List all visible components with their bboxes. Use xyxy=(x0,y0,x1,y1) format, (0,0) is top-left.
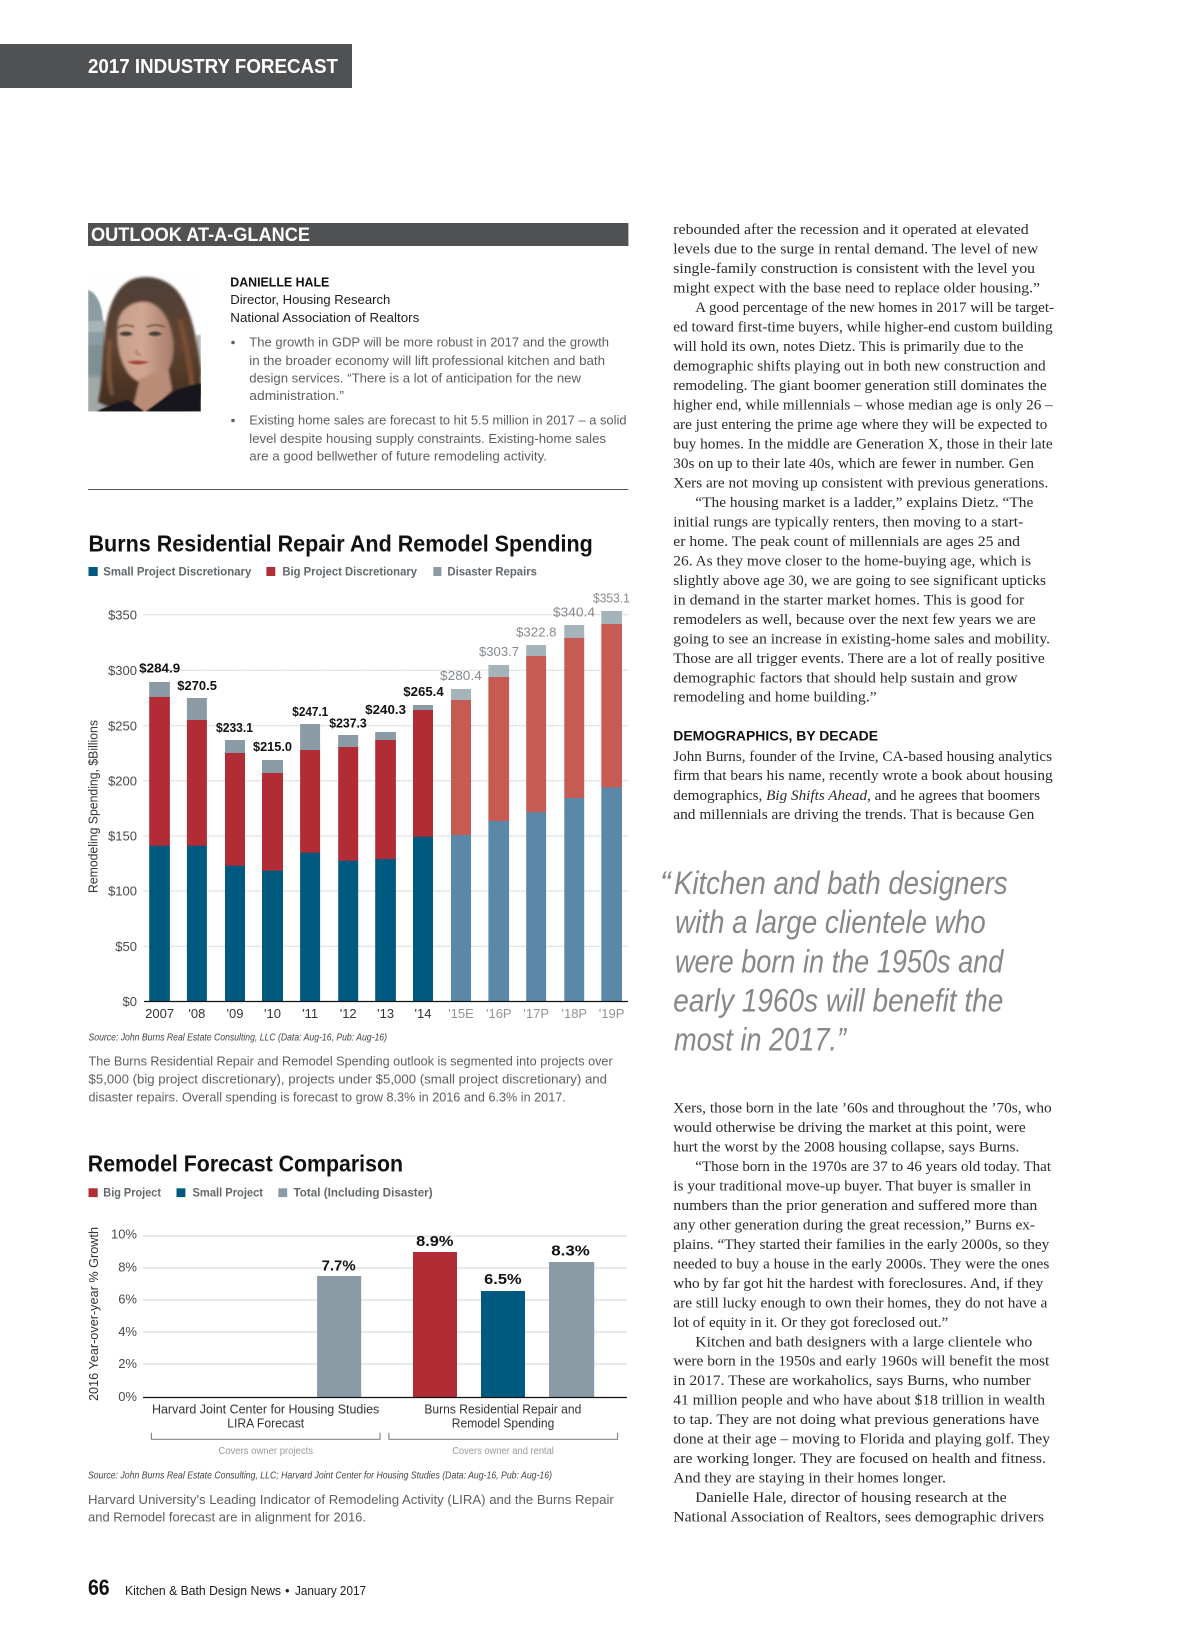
expert name and title xyxy=(230,275,420,325)
x axis labels: '13 xyxy=(377,1006,394,1021)
article text: upper column: initial rungs are typically renters, then moving to a start- xyxy=(673,514,1023,530)
legend: spending categories: Disaster Repairs xyxy=(447,564,537,578)
expert name and title: DANIELLE HALE xyxy=(230,275,330,290)
value labels: actual: $247.1 xyxy=(292,704,328,719)
value labels: forecast: $322.8 xyxy=(516,625,556,640)
article text: demographics intro: firm that bears his name, recently wrote a book about housing xyxy=(673,768,1053,784)
actual bars 2007-2014 xyxy=(149,682,433,1002)
article text: demographics intro: demographics, Big Shifts Ahead, and he agrees that boomers xyxy=(673,788,1040,804)
article text: lower column: who by far got hit the hardest with foreclosures. And, if they xyxy=(673,1276,1044,1292)
gridlines and y axis: $200 xyxy=(108,774,137,788)
gridlines and y axis: 8% xyxy=(118,1260,137,1274)
article text: upper column xyxy=(673,222,1054,706)
legend: spending categories: Small Project Discretionary xyxy=(103,564,252,578)
bullet: GDP growth: in the broader economy will lift professional kitchen and bath xyxy=(249,353,605,368)
value labels: actual: $233.1 xyxy=(216,720,253,735)
x axis labels: '14 xyxy=(415,1006,431,1021)
article text: upper column: going to see an increase in existing-home sales and mobility. xyxy=(673,631,1050,647)
article text: lower column: hurt the worst by the 2008 housing collapse, says Burns. xyxy=(673,1139,1019,1155)
article text: lower column: “Those born in the 1970s are 37 to 46 years old today. That xyxy=(695,1159,1052,1175)
chart caption: Harvard University's Leading Indicator of Remodeling Activity (LIRA) and the Burns Repair xyxy=(88,1492,614,1507)
article text: lower column: are working longer. They are focused on health and fitness. xyxy=(673,1451,1046,1467)
chart caption: The Burns Residential Repair and Remodel Spending outlook is segmented into projects over xyxy=(88,1054,613,1069)
heading: Remodel Forecast Comparison: Remodel Forecast Comparison xyxy=(88,1151,403,1177)
legend: project types: Total (Including Disaster) xyxy=(294,1186,433,1200)
gridlines and y axis: 2% xyxy=(118,1356,137,1371)
pull quote: “ xyxy=(660,865,673,901)
article text: lower column xyxy=(673,1100,1052,1526)
gridlines and y axis: $0 xyxy=(123,994,137,1009)
x axis labels: '16P xyxy=(486,1006,512,1021)
source note: Source: John Burns Real Estate Consulting, LLC (Data: Aug-16, Pub: Aug-16) xyxy=(88,1033,387,1044)
pull quote: most in 2017.” xyxy=(674,1022,847,1058)
value labels: forecast: $340.4 xyxy=(553,605,595,620)
article text: lower column: National Association of Realtors, sees demographic drivers xyxy=(673,1510,1044,1526)
bar value labels: 6.5% xyxy=(484,1271,522,1288)
article text: upper column: “The housing market is a ladder,” explains Dietz. “The xyxy=(695,495,1034,511)
article text: upper column: rebounded after the recession and it operated at elevated xyxy=(673,222,1029,238)
gridlines and y axis: $150 xyxy=(108,828,137,844)
forecast bars 2015-2019 xyxy=(451,611,622,1002)
bar value labels: 8.9% xyxy=(416,1233,454,1250)
value labels: forecast xyxy=(440,591,630,683)
x axis labels: '08 xyxy=(188,1006,205,1021)
article text: upper column: ed toward first-time buyers, while higher-end custom building xyxy=(673,319,1053,335)
article text: upper column: slightly above age 30, we are going to see significant upticks xyxy=(673,573,1046,589)
legend: project types: Big Project xyxy=(103,1186,161,1200)
x axis labels: 2007 xyxy=(145,1006,174,1021)
gridlines and y axis: Remodeling Spending, $Billions xyxy=(87,720,101,893)
value labels: actual xyxy=(139,661,444,754)
value labels: actual: $240.3 xyxy=(365,702,406,717)
article text: upper column: higher end, while millennials – whose median age is only 26 – xyxy=(673,397,1053,413)
article text: lower column: would otherwise be driving the market at this point, were xyxy=(673,1120,1026,1136)
legend: project types: Small Project xyxy=(192,1186,263,1200)
value labels: actual: $265.4 xyxy=(403,684,444,699)
article text: upper column: 30s on up to their late 40s, which are fewer in number. Gen xyxy=(673,456,1035,472)
gridlines and y axis: $250 xyxy=(108,718,137,734)
article text: upper column: levels due to the surge in rental demand. The level of new xyxy=(673,242,1039,258)
bullet: GDP growth xyxy=(231,335,609,403)
article text: upper column: A good percentage of the new homes in 2017 will be target- xyxy=(695,300,1054,316)
article text: upper column: 26. As they move closer to the home-buying age, which is xyxy=(673,553,1031,569)
chart caption: and Remodel forecast are in alignment for 2016. xyxy=(88,1510,366,1525)
article text: lower column: in 2017. These are workaholics, says Burns, who number xyxy=(673,1373,1031,1389)
group label: Harvard xyxy=(151,1401,380,1457)
x axis labels: '18P xyxy=(561,1006,587,1021)
legend: spending categories xyxy=(88,564,537,578)
x axis labels xyxy=(145,1006,624,1021)
heading: outlook at-a-glance xyxy=(88,223,628,246)
article text: lower column: done at their age – moving to Florida and playing golf. They xyxy=(673,1432,1051,1448)
bullet: GDP growth: administration.” xyxy=(249,388,344,403)
heading: Burns Residential Repair And Remodel Spending: Burns Residential Repair And Remodel Spending xyxy=(88,531,593,557)
article text: lower column: plains. “They started their families in the early 2000s, so they xyxy=(673,1237,1050,1253)
article text: upper column: might expect with the base need to replace older housing.” xyxy=(673,280,1040,296)
chart caption xyxy=(88,1054,613,1105)
gridlines and y axis: $300 xyxy=(108,663,137,678)
article text: lower column: Xers, those born in the late ’60s and throughout the ’70s, who xyxy=(673,1100,1052,1116)
gridlines and y axis: 6% xyxy=(118,1292,137,1306)
heading: outlook at-a-glance: OUTLOOK AT-A-GLANCE xyxy=(91,225,310,246)
gridlines and y axis: 2016 Year-over-year % Growth xyxy=(87,1227,101,1401)
section banner: 2017 industry forecast: 2017 INDUSTRY FORECAST xyxy=(88,56,338,78)
article text: lower column: any other generation during the great recession,” Burns ex- xyxy=(673,1217,1035,1233)
bullet: GDP growth: design services. “There is a lot of anticipation for the new xyxy=(249,371,582,386)
x axis labels: '12 xyxy=(340,1006,357,1021)
section banner: 2017 industry forecast xyxy=(0,44,352,88)
group label: Burns: Covers owner and rental xyxy=(452,1446,554,1457)
gridlines and y axis: 4% xyxy=(118,1324,137,1339)
folio: page number and publication: • xyxy=(285,1583,290,1598)
value labels: forecast: $353.1 xyxy=(593,591,630,606)
article text: lower column: Kitchen and bath designers with a large clientele who xyxy=(695,1334,1032,1350)
bar value labels: 8.3% xyxy=(551,1243,590,1260)
bar value labels xyxy=(322,1233,590,1288)
stacked bar chart: remodeling spending xyxy=(87,591,630,1021)
article text: lower column: lot of equity in it. Or they got foreclosed out.” xyxy=(673,1315,948,1331)
article text: lower column: Danielle Hale, director of housing research at the xyxy=(695,1490,1007,1506)
folio: page number and publication: 66 xyxy=(88,1575,110,1600)
article text: lower column: are still lucky enough to own their homes, they do not have a xyxy=(673,1295,1048,1311)
x axis labels: '15E xyxy=(448,1006,474,1021)
article text: upper column: will hold its own, notes Dietz. This is primarily due to the xyxy=(673,339,1024,355)
group label: Burns xyxy=(389,1401,618,1457)
pull quote: were born in the 1950s and xyxy=(675,943,1004,979)
article text: upper column: single-family construction is consistent with the level you xyxy=(673,261,1036,277)
article text: upper column: er home. The peak count of millennials are ages 25 and xyxy=(673,534,1021,550)
legend: spending categories: Big Project Discretionary xyxy=(282,564,417,578)
panel: Burns spending chart xyxy=(87,531,630,1105)
legend: project types xyxy=(88,1186,433,1200)
bullet: existing home sales xyxy=(231,413,626,464)
gridlines and y axis: $350 xyxy=(108,608,137,622)
bars xyxy=(317,1252,594,1398)
article text: lower column: were born in the 1950s and early 1960s will benefit the most xyxy=(673,1354,1050,1370)
value labels: actual: $237.3 xyxy=(329,715,367,730)
value labels: actual: $215.0 xyxy=(253,739,292,754)
article text: upper column: demographic shifts playing out in both new construction and xyxy=(673,358,1046,374)
source note: Source: John Burns Real Estate Consulting, LLC; Harvard Joint Center for Housing Studies (Data: Aug-16, Pub: Aug-16) xyxy=(88,1471,552,1482)
article text: demographics intro xyxy=(673,749,1053,823)
x axis labels: '11 xyxy=(302,1006,318,1021)
bullet: existing home sales: are a good bellwether of future remodeling activity. xyxy=(249,449,547,464)
gridlines and y axis xyxy=(87,1226,627,1404)
chart caption xyxy=(88,1492,614,1525)
group label: Harvard: Covers owner projects xyxy=(218,1446,313,1457)
article text: upper column: remodelers as well, because over the next few years we are xyxy=(673,612,1036,628)
bullet: GDP growth: The growth in GDP will be more robust in 2017 and the growth xyxy=(249,335,609,350)
panel: outlook at-a-glance xyxy=(88,223,628,464)
article text: upper column: remodeling and home building.” xyxy=(673,690,877,706)
x axis labels: '17P xyxy=(523,1006,549,1021)
article text: lower column: is your traditional move-up buyer. That buyer is smaller in xyxy=(673,1178,1032,1194)
gridlines and y axis: 10% xyxy=(111,1226,137,1242)
article text: lower column: to tap. They are not doing what previous generations have xyxy=(673,1412,1039,1428)
folio: page number and publication: January 2017 xyxy=(295,1583,366,1598)
group label: Burns: Remodel Spending xyxy=(452,1415,554,1430)
folio: page number and publication: Kitchen & Bath Design News xyxy=(125,1583,281,1598)
x axis labels: '19P xyxy=(599,1006,624,1021)
article text: demographics intro: John Burns, founder of the Irvine, CA-based housing analytics xyxy=(673,749,1052,765)
expert name and title: Director, Housing Research xyxy=(230,292,390,307)
gridlines and y axis: $100 xyxy=(108,884,137,898)
x axis labels: '10 xyxy=(264,1006,281,1021)
group label: Harvard: Harvard Joint Center for Housing Studies xyxy=(152,1401,380,1416)
bar value labels: 7.7% xyxy=(322,1258,356,1275)
group label: Burns: Burns Residential Repair and xyxy=(424,1401,581,1416)
article text: lower column: 41 million people and who have about $18 trillion in wealth xyxy=(673,1393,1046,1409)
pull quote: Kitchen and bath designers xyxy=(674,865,1008,901)
article text: upper column: remodeling. The giant boomer generation still dominates the xyxy=(673,378,1047,394)
gridlines and y axis xyxy=(87,608,627,1009)
gridlines and y axis: 0% xyxy=(118,1389,137,1404)
article text: upper column: Those are all trigger events. There are a lot of really positive xyxy=(673,651,1045,667)
article text: upper column: in demand in the starter market homes. This is good for xyxy=(673,592,1024,608)
value labels: forecast: $303.7 xyxy=(479,644,519,659)
panel: remodel forecast comparison xyxy=(87,1151,627,1525)
bullet: existing home sales: level despite housing supply constraints. Existing-home sales xyxy=(249,431,606,446)
group label: Harvard: LIRA Forecast xyxy=(227,1415,305,1430)
article text: lower column: numbers than the prior generation and suffered more than xyxy=(673,1198,1038,1214)
gridlines and y axis: $50 xyxy=(115,939,137,954)
expert name and title: National Association of Realtors xyxy=(230,310,420,325)
value labels: actual: $284.9 xyxy=(139,661,180,676)
article text: upper column: Xers are not moving up consistent with previous generations. xyxy=(673,475,1048,491)
value labels: actual: $270.5 xyxy=(177,678,217,693)
chart caption: disaster repairs. Overall spending is forecast to grow 8.3% in 2016 and 6.3% in 2017. xyxy=(88,1090,566,1105)
folio: page number and publication xyxy=(88,1575,366,1600)
chart caption: $5,000 (big project discretionary), projects under $5,000 (small project discretionary) and xyxy=(88,1072,607,1087)
pull quote: early 1960s will benefit the xyxy=(673,982,1003,1018)
portrait photo: Danielle Hale xyxy=(88,272,201,412)
article text: demographics intro: and millennials are driving the trends. That is because Gen xyxy=(673,807,1035,823)
article text: lower column: needed to buy a house in the early 2000s. They were the ones xyxy=(673,1256,1050,1272)
x axis labels: '09 xyxy=(227,1006,243,1021)
value labels: forecast: $280.4 xyxy=(440,668,482,683)
subheading: demographics, by decade: DEMOGRAPHICS, BY DECADE xyxy=(673,729,878,744)
pull quote: with a large clientele who xyxy=(675,904,986,940)
article text: upper column: buy homes. In the middle are Generation X, those in their late xyxy=(673,436,1053,452)
article text: upper column: demographic factors that should help sustain and grow xyxy=(673,670,1018,686)
article text: upper column: are just entering the prime age where they will be expected to xyxy=(673,417,1047,433)
bullet: existing home sales: Existing home sales are forecast to hit 5.5 million in 2017 – a solid xyxy=(249,413,627,428)
pull quote xyxy=(660,865,1008,1058)
bar chart: 2016 growth xyxy=(87,1226,627,1457)
article text: lower column: And they are staying in their homes longer. xyxy=(673,1471,946,1487)
